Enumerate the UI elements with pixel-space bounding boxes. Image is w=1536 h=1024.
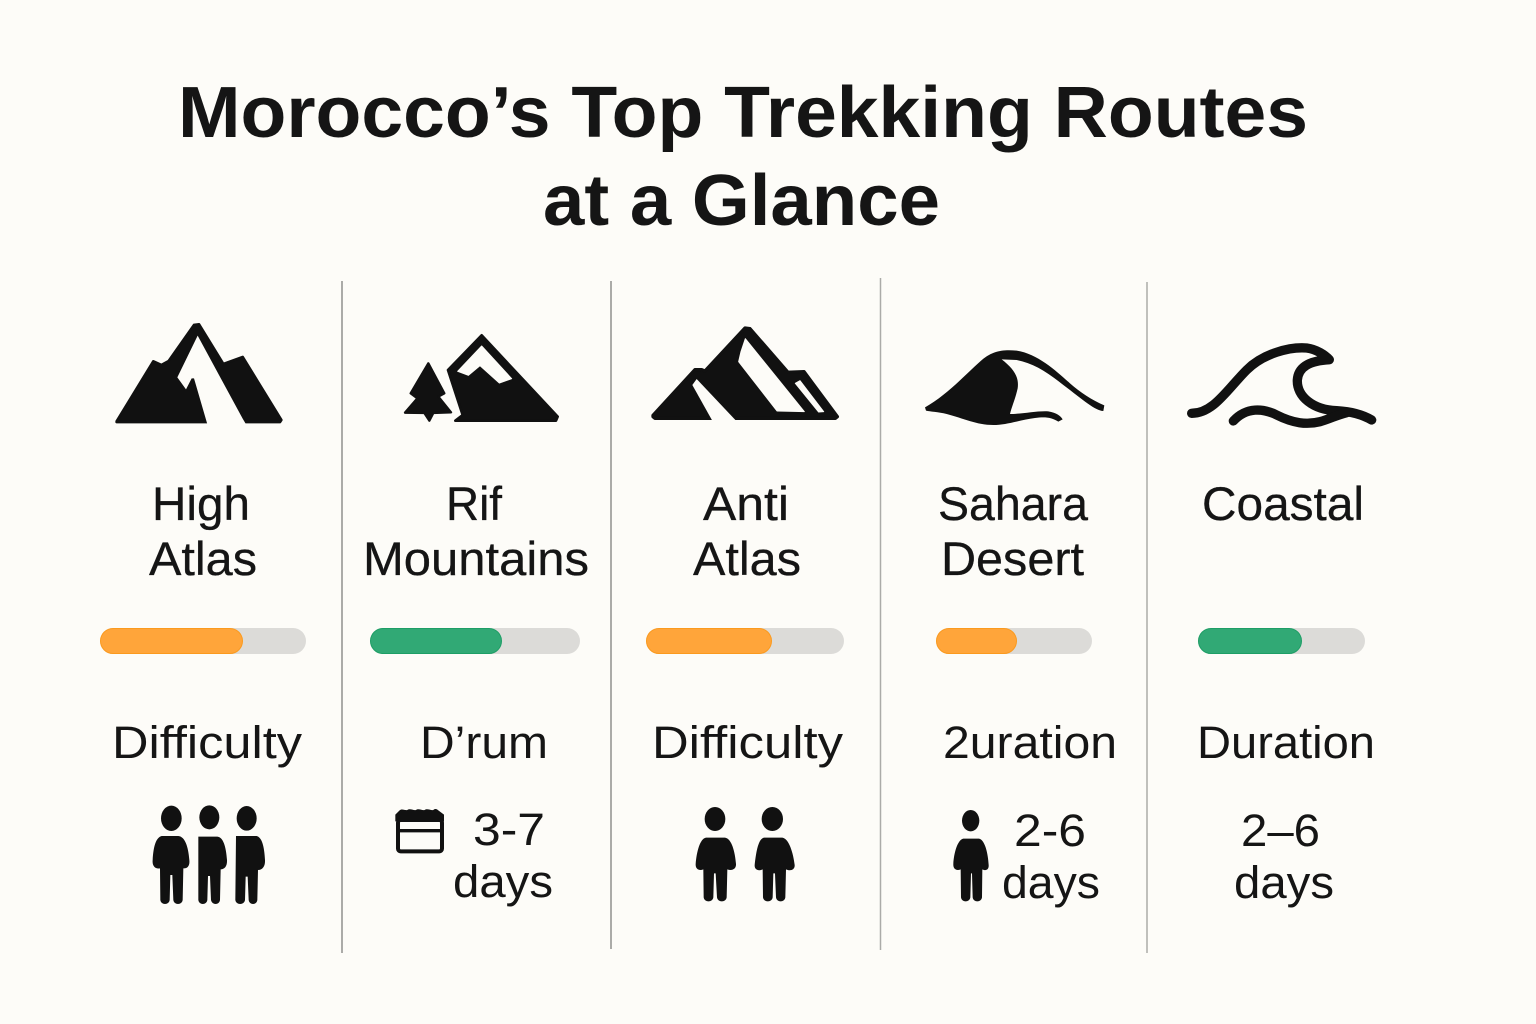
- route name: Anti: [703, 477, 789, 530]
- route name: Mountains: [363, 532, 589, 585]
- title: [178, 73, 1308, 241]
- icon: three people: [153, 805, 265, 904]
- icon: sand dune: [925, 350, 1104, 425]
- panel: Rif Mountains: [363, 335, 589, 907]
- route name: Desert: [941, 532, 1084, 585]
- duration value: 2–6: [1241, 805, 1320, 856]
- route name: High: [152, 477, 250, 530]
- progress bar: difficulty orange: [646, 628, 844, 654]
- metric label: Difficulty: [112, 717, 303, 768]
- duration value: days: [1234, 857, 1334, 908]
- route name: Atlas: [693, 532, 801, 585]
- progress bar: easy green: [1198, 628, 1365, 654]
- icon: calendar: [395, 809, 444, 851]
- metric label: Difficulty: [652, 717, 844, 768]
- panel: Anti Atlas: [646, 328, 844, 901]
- route name: Atlas: [149, 532, 257, 585]
- metric label: D’rum: [420, 717, 548, 768]
- icon: ocean wave: [1192, 348, 1372, 423]
- progress bar: easy green: [370, 628, 580, 654]
- route name: [149, 477, 257, 585]
- route name: Rif: [446, 477, 503, 530]
- route name: Sahara: [938, 477, 1089, 530]
- progress bar: difficulty orange: [100, 628, 306, 654]
- icon: Anti Atlas mountain: [653, 328, 837, 421]
- panel: High Atlas: [100, 324, 306, 904]
- panel: Sahara Desert: [925, 350, 1117, 908]
- metric label: 2uration: [943, 717, 1117, 768]
- metric label: Duration: [1197, 717, 1375, 768]
- route name: Coastal: [1202, 477, 1364, 530]
- icon: Rif mountain with tree: [405, 335, 558, 421]
- route name: [363, 477, 589, 585]
- icon: two people: [696, 807, 795, 901]
- icon: High Atlas mountain: [117, 324, 281, 425]
- route name: [693, 477, 801, 585]
- duration value: [1234, 805, 1334, 908]
- icon: one person: [953, 810, 989, 901]
- duration value: days: [1002, 857, 1100, 908]
- progress bar: difficulty orange: [936, 628, 1092, 654]
- title: Morocco’s Top Trekking Routes: [178, 73, 1308, 153]
- panel: Coastal: [1192, 348, 1375, 908]
- route name: [938, 477, 1089, 585]
- duration value: [1002, 805, 1100, 908]
- duration value: 2-6: [1014, 805, 1086, 856]
- duration value: days: [453, 856, 553, 907]
- duration value: 3-7: [473, 804, 545, 855]
- title: at a Glance: [543, 161, 940, 241]
- duration value: [453, 804, 553, 907]
